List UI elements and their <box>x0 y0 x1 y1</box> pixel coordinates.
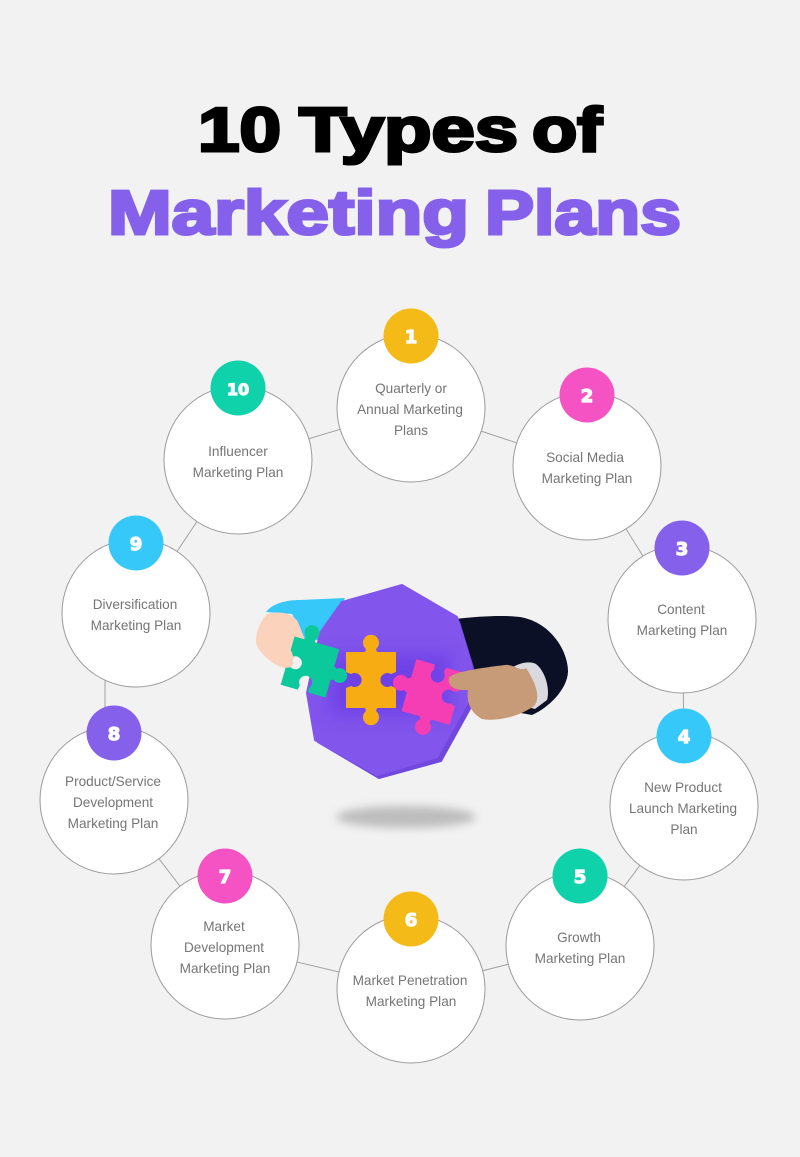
node 7: market development <box>151 848 299 1019</box>
node 9: diversification: Diversification <box>93 597 177 612</box>
orange puzzle piece <box>346 635 396 725</box>
title: Plans <box>485 179 681 248</box>
node 6: market penetration: 6 <box>405 910 417 931</box>
connector ring <box>105 408 684 989</box>
green puzzle piece <box>281 621 358 702</box>
node 7: market development: 7 <box>219 867 231 888</box>
node 2: social media <box>513 368 661 540</box>
node 1: quarterly or annual: Plans <box>394 423 428 438</box>
node 7: market development: Market <box>203 919 245 934</box>
node 9: diversification <box>62 516 210 687</box>
node 9: diversification: Marketing Plan <box>91 618 181 633</box>
node 10: influencer: Influencer <box>208 444 268 459</box>
node 5: growth: Marketing Plan <box>535 951 625 966</box>
node 8: product/service development: Product/Service <box>65 774 161 789</box>
node 3: content: Content <box>657 602 705 617</box>
node 4: new product launch: New Product <box>644 780 722 795</box>
node 8: product/service development: 8 <box>108 724 120 745</box>
node 6: market penetration <box>337 892 485 1063</box>
node 1: quarterly or annual: 1 <box>405 327 417 348</box>
node 5: growth: 5 <box>574 867 586 888</box>
title: Marketing <box>108 179 469 248</box>
node 7: market development: Marketing Plan <box>180 961 270 976</box>
node 8: product/service development: Development <box>73 795 153 810</box>
purple octagon <box>307 585 471 775</box>
shadow <box>336 806 476 828</box>
node 10: influencer: 10 <box>227 380 249 399</box>
left hand <box>256 613 305 668</box>
node 5: growth: Growth <box>557 930 601 945</box>
central illustration: hands joining puzzle pieces <box>256 585 568 828</box>
node 8: product/service development <box>40 706 188 874</box>
node 8: product/service development: Marketing Plan <box>68 816 158 831</box>
left sleeve <box>266 598 345 640</box>
node 5: growth <box>506 848 654 1020</box>
node 2: social media: Social Media <box>546 450 624 465</box>
node 1: quarterly or annual <box>337 308 485 482</box>
node 2: social media: Marketing Plan <box>542 471 632 486</box>
left fingers <box>277 642 293 667</box>
title: Types <box>299 96 518 165</box>
node 4: new product launch: Launch Marketing <box>629 801 737 816</box>
node 6: market penetration: Marketing Plan <box>366 994 456 1009</box>
dark right sleeve <box>455 616 568 715</box>
node 1: quarterly or annual: Annual Marketing <box>357 402 463 417</box>
node 4: new product launch: 4 <box>678 727 690 748</box>
node 2: social media: 2 <box>581 386 593 407</box>
white shirt cuff <box>510 662 548 709</box>
pink puzzle piece <box>381 655 464 741</box>
title: 10 <box>198 96 281 165</box>
node 9: diversification: 9 <box>130 534 142 555</box>
right pointing hand <box>449 665 537 720</box>
node 4: new product launch: Plan <box>670 822 698 837</box>
node 4: new product launch <box>610 708 758 880</box>
node 3: content: 3 <box>676 539 688 560</box>
node 6: market penetration: Market Penetration <box>353 973 467 988</box>
node 7: market development: Development <box>184 940 264 955</box>
title: of <box>532 96 602 165</box>
title <box>108 96 681 248</box>
puzzle shadows <box>330 655 450 715</box>
node 3: content: Marketing Plan <box>637 623 727 638</box>
node 10: influencer: Marketing Plan <box>193 465 283 480</box>
node 3: content <box>608 520 756 693</box>
node 1: quarterly or annual: Quarterly or <box>375 381 447 396</box>
node 10: influencer <box>164 360 312 534</box>
purple octagon back layer <box>309 590 473 778</box>
